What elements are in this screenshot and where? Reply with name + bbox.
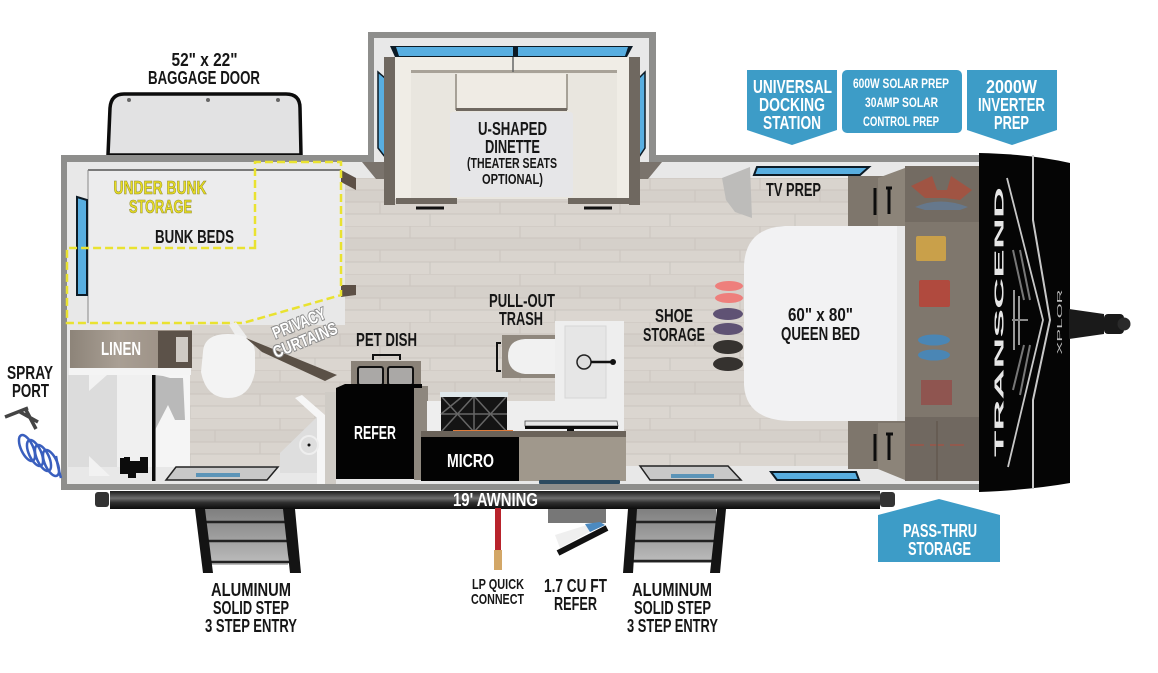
brand name: TRANSCEND	[992, 187, 1006, 457]
pass-thru storage area	[905, 166, 979, 481]
bunk beds label: BUNK BEDS	[155, 227, 234, 247]
kitchen cabinet	[519, 421, 626, 484]
dinette table: DINETTE	[485, 137, 540, 157]
pull-out trash	[497, 335, 555, 378]
kitchen counter	[427, 321, 624, 432]
dinette table: (THEATER SEATS	[467, 155, 557, 172]
label: lp quick connect: LP QUICK	[472, 576, 524, 593]
shoe storage shoes	[713, 281, 743, 371]
dinette table: OPTIONAL)	[482, 171, 543, 188]
tv prep window	[754, 167, 869, 175]
under bunk storage label	[114, 178, 206, 217]
queen bed: QUEEN BED	[781, 324, 860, 344]
callout: solar prep: 600W SOLAR PREP	[853, 75, 949, 91]
label: outside refer: REFER	[554, 594, 597, 614]
spray port hose	[5, 408, 62, 478]
baggage door	[108, 94, 301, 155]
wardrobes	[848, 168, 906, 480]
bathroom sink	[280, 392, 336, 484]
linen cabinet	[69, 330, 192, 375]
bunk beds	[77, 170, 356, 323]
toilet	[201, 322, 255, 398]
hitch	[1069, 309, 1130, 339]
microwave: MICRO	[447, 451, 494, 471]
callout: universal docking station: UNIVERSAL	[753, 77, 832, 97]
floor mats	[166, 466, 741, 480]
label: baggage door: BAGGAGE DOOR	[148, 68, 260, 88]
queen bed: 60" x 80"	[788, 305, 853, 325]
dinette table	[450, 112, 573, 197]
callout: universal docking station	[747, 70, 837, 145]
pet dish	[351, 355, 421, 385]
label: pull-out trash: PULL-OUT	[489, 291, 555, 311]
label: shoe storage: STORAGE	[643, 325, 705, 345]
trailer body	[61, 155, 982, 490]
bunk window	[77, 197, 87, 295]
label: tv prep: TV PREP	[766, 180, 821, 200]
callout: inverter prep	[967, 70, 1057, 145]
label: pull-out trash	[489, 291, 555, 329]
label: right aluminum step: ALUMINUM	[632, 580, 712, 600]
label: pull-out trash: TRASH	[499, 309, 543, 329]
under bunk storage label: UNDER BUNK	[114, 178, 206, 198]
microwave	[421, 431, 519, 481]
callout: solar prep: CONTROL PREP	[863, 113, 939, 129]
privacy curtains label: PRIVACY	[270, 304, 329, 343]
label: lp quick connect	[471, 576, 524, 608]
callout: pass-thru storage: PASS-THRU	[903, 521, 977, 541]
stove	[440, 392, 513, 435]
label: right aluminum step: 3 STEP ENTRY	[627, 616, 718, 636]
dinette	[384, 57, 640, 208]
refrigerator: REFER	[354, 423, 396, 443]
under bunk storage label: STORAGE	[129, 197, 192, 217]
callout: inverter prep: INVERTER	[978, 95, 1045, 115]
label: shoe storage	[643, 306, 705, 345]
dinette table: U-SHAPED	[478, 119, 547, 139]
label: outside refer: 1.7 CU FT	[544, 576, 607, 596]
label: baggage door	[148, 50, 260, 88]
outside refrigerator	[548, 509, 607, 553]
label: left aluminum step: 3 STEP ENTRY	[205, 616, 297, 636]
sub brand: XPLOR	[1057, 290, 1064, 354]
label: lp quick connect: CONNECT	[471, 591, 524, 608]
callout: universal docking station: STATION	[763, 113, 821, 133]
callout: universal docking station: DOCKING	[759, 95, 825, 115]
linen cabinet: LINEN	[101, 339, 141, 359]
privacy curtains label: CURTAINS	[270, 319, 340, 362]
shower fixture	[120, 457, 148, 478]
label: baggage door: 52" x 22"	[172, 50, 238, 70]
privacy curtain bar	[246, 338, 337, 381]
label: spray port	[7, 363, 53, 401]
front cap	[979, 153, 1070, 492]
right entry steps	[623, 509, 726, 573]
refrigerator	[336, 384, 428, 480]
left entry steps	[195, 509, 301, 573]
awning	[95, 490, 895, 510]
label: shoe storage: SHOE	[655, 306, 693, 326]
label: pet dish: PET DISH	[356, 330, 417, 350]
callout: inverter prep: PREP	[994, 113, 1029, 133]
cap graphics	[1007, 155, 1050, 489]
slide-out	[362, 32, 662, 179]
queen bed	[744, 226, 897, 421]
curtain near tv	[722, 167, 752, 218]
callout: pass-thru storage: STORAGE	[908, 539, 971, 559]
lp quick connect hose	[494, 508, 502, 570]
kitchen sink	[565, 326, 616, 398]
label: left aluminum step: SOLID STEP	[213, 598, 289, 618]
bathroom shower	[68, 375, 190, 481]
slide windows	[378, 46, 645, 157]
under bunk storage outline	[67, 162, 341, 323]
callout: solar prep: 30AMP SOLAR	[865, 94, 938, 110]
label: outside refer	[544, 576, 607, 614]
callout: inverter prep: 2000W	[986, 77, 1037, 97]
label: right aluminum step: SOLID STEP	[634, 598, 711, 618]
label: spray port: PORT	[12, 381, 49, 401]
label: right aluminum step	[627, 580, 718, 636]
callout: pass-thru storage	[878, 499, 1000, 562]
awning: 19' AWNING	[453, 490, 538, 510]
slide floor wedges	[362, 162, 662, 179]
label: left aluminum step: ALUMINUM	[211, 580, 291, 600]
callout: solar prep	[842, 70, 962, 133]
bottom window	[771, 472, 859, 480]
label: left aluminum step	[205, 580, 297, 636]
label: spray port: SPRAY	[7, 363, 53, 383]
